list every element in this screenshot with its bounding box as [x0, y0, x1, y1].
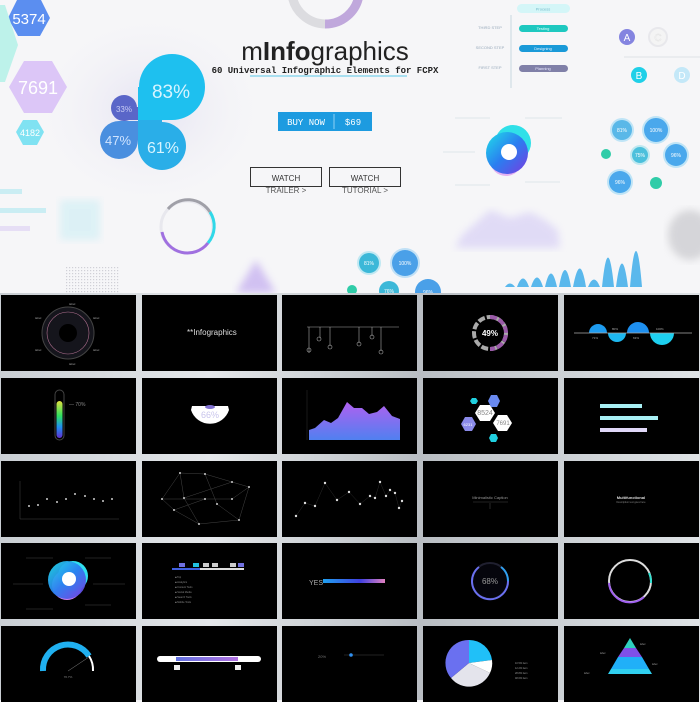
- thumb: radial chart: label: [93, 348, 100, 352]
- thumb: radial chart: label: [69, 302, 76, 306]
- process panel: SECOND STEP: [476, 45, 505, 50]
- hex 7691: 7691: [18, 78, 58, 98]
- thumb: infographics title: **Infographics: [187, 328, 237, 337]
- thumb: minimalistic caption: [423, 461, 558, 537]
- process panel: THIRD STEP: [478, 25, 502, 30]
- thumb: 49% donut: 49%: [482, 329, 498, 338]
- thumb: radial chart: [1, 295, 136, 371]
- thumb: hexagons: 8524: [477, 410, 493, 417]
- process panel: FIRST STEP: [478, 65, 502, 70]
- buy button: BUY NOW: [287, 118, 325, 128]
- petal chart: [100, 54, 205, 170]
- hex 5374: [8, 0, 50, 36]
- spike chart: [505, 251, 642, 287]
- petal chart: 33%: [116, 105, 132, 114]
- thumb: scatter: [1, 461, 136, 537]
- hex 5374: 5374: [12, 11, 46, 28]
- watch trailer button: [250, 168, 322, 195]
- thumb: radial chart: label: [35, 316, 42, 320]
- thumb: pie: [423, 626, 558, 702]
- thumb: network: [142, 461, 277, 537]
- thumb: timeline: [282, 295, 417, 371]
- bubbles bottom middle: 100%: [399, 261, 412, 267]
- watch trailer button: WATCH: [272, 174, 300, 183]
- thumb: minimalistic caption: Minimalistic Caption: [472, 495, 508, 500]
- watch trailer button: TRAILER >: [266, 186, 307, 195]
- thumb: progress list: [142, 543, 277, 619]
- watch tutorial button: WATCH: [351, 174, 379, 183]
- watch tutorial button: [330, 168, 400, 195]
- top hero area: [0, 0, 700, 293]
- thumb: progress list: ■ Top: [175, 576, 182, 579]
- letter circles: B: [636, 71, 643, 82]
- process panel: Testing: [537, 26, 549, 31]
- thumb: horizontal bars: [564, 378, 699, 454]
- blurred area chart: [455, 210, 560, 248]
- top donut: [292, 0, 359, 24]
- letter circles: C: [654, 33, 662, 44]
- thumb: YES bar: YES: [309, 580, 323, 587]
- thumb: infographics title: [142, 295, 277, 371]
- subtitle: 60 Universal Infographic Elements for FCPX: [212, 66, 439, 76]
- thumb: 68% ring: [423, 543, 558, 619]
- petal chart: 83%: [152, 82, 190, 103]
- thumb: wave chart: 100%: [656, 327, 664, 331]
- bubble chart right: 81%: [617, 128, 628, 134]
- thumb: pyramid: [564, 626, 699, 702]
- faint bars left: [0, 189, 100, 240]
- letter circles: [619, 28, 700, 83]
- letter circles: A: [624, 33, 631, 44]
- bubble chart right: 100%: [650, 128, 663, 134]
- process panel: [476, 4, 570, 88]
- thumb: orb with labels: [1, 543, 136, 619]
- thumb: 68% ring: 68%: [482, 577, 498, 586]
- thumb: pie: 48.6% item: [515, 677, 528, 680]
- hex 7691: [9, 61, 67, 113]
- thumb: radial chart: label: [69, 362, 76, 366]
- petal chart: 61%: [147, 140, 179, 157]
- thumb: multifunctional: [564, 461, 699, 537]
- thumb: gauge: 70.7%: [64, 675, 73, 679]
- thumb: thermometer: [1, 378, 136, 454]
- thumb: hexagons: 7691: [496, 421, 510, 427]
- watch tutorial button: TUTORIAL >: [342, 186, 388, 195]
- thumb: hexagons: 6231: [464, 422, 473, 427]
- thumb: progress list: ■ Social Media: [175, 591, 192, 594]
- bubbles bottom middle: [347, 248, 441, 305]
- bubble chart right: [601, 116, 689, 195]
- thumb: multifunctional: Description text goes here: [616, 501, 646, 504]
- thumb: pie: 10.5% item: [515, 662, 528, 665]
- hex partial teal: [0, 5, 18, 82]
- hex 4182: 4182: [20, 128, 40, 138]
- thumb: slider: [282, 626, 417, 702]
- thumb: progress list: ■ Mobile Tools: [175, 601, 192, 604]
- thumb: pyramid: label: [600, 652, 606, 655]
- buy button: $69: [345, 118, 361, 128]
- thumb: wave chart: [564, 295, 699, 371]
- thumb: 49% donut: [423, 295, 558, 371]
- hex 4182: [16, 120, 44, 145]
- thumb: multifunctional: Multifunctional: [617, 495, 645, 500]
- thumb: pyramid: label: [640, 643, 646, 646]
- buy button: [278, 112, 372, 131]
- thumb: 66% half circle: 66%: [201, 410, 219, 420]
- thumb: wave chart: 80%: [612, 327, 618, 331]
- process panel: Designing: [534, 46, 552, 51]
- thumb: YES bar: [282, 543, 417, 619]
- petal chart: 47%: [105, 133, 131, 148]
- thumb: radial chart: label: [93, 316, 100, 320]
- bubble chart right: 75%: [635, 153, 646, 159]
- thumb: range bar: [142, 626, 277, 702]
- thumb: wave chart: 71%: [592, 336, 598, 340]
- bubble chart right: 96%: [671, 153, 682, 159]
- bubbles bottom middle: 81%: [364, 261, 375, 267]
- blurred triangle: [236, 260, 276, 293]
- thumb: glowing ring: [564, 543, 699, 619]
- orb: [443, 118, 562, 185]
- thumb: pie: 28.8% item: [515, 672, 528, 675]
- thumb: hexagons: [423, 378, 558, 454]
- thumb: progress list: ■ Content Tools: [175, 586, 193, 589]
- thumb: gauge: [1, 626, 136, 702]
- bubble chart right: 96%: [615, 180, 626, 186]
- thumb: progress list: ■ Search Tools: [175, 596, 192, 599]
- thumb: pyramid: label: [652, 663, 658, 666]
- thumb: slider: 20%: [318, 654, 326, 659]
- title: mInfographics: [241, 36, 409, 66]
- ring: [161, 200, 214, 253]
- thumb: radial chart: label: [35, 348, 42, 352]
- thumbnail grid: [0, 293, 700, 700]
- thumb: dots line: [282, 461, 417, 537]
- process panel: Process: [536, 6, 550, 12]
- thumb: area chart: [282, 378, 417, 454]
- thumb: wave chart: 63%: [633, 336, 639, 340]
- thumb: thermometer: — 70%: [69, 402, 86, 408]
- dot grid: [65, 266, 120, 293]
- thumb: 66% half circle: [142, 378, 277, 454]
- process panel: Planning: [535, 66, 551, 71]
- thumb: pyramid: label: [584, 672, 590, 675]
- thumb: progress list: ■ Analytics: [175, 581, 188, 584]
- thumb: pie: 12.2% item: [515, 667, 528, 670]
- letter circles: D: [678, 71, 686, 82]
